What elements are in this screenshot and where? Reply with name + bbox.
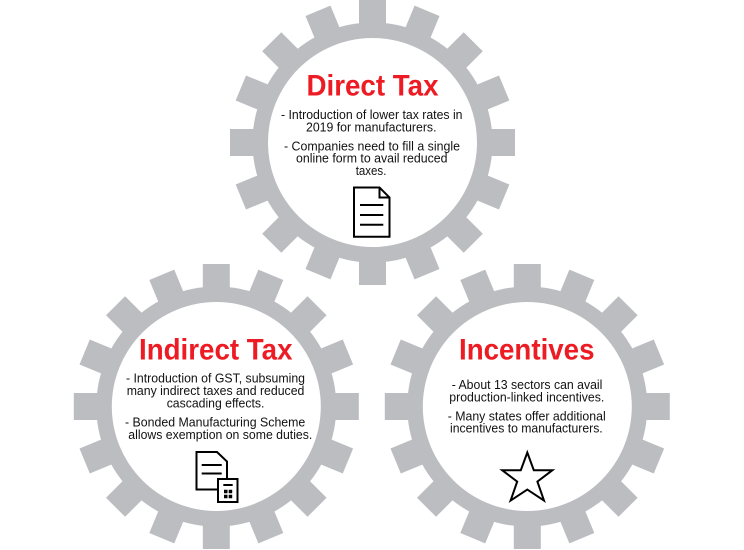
text block: indirect tax points: - Bonded Manufacturing Scheme	[125, 415, 305, 430]
text block: indirect tax points: allows exemption on some duties.	[128, 427, 312, 442]
panel: direct tax	[230, 0, 515, 285]
text block: direct tax points: - Companies need to fill a single	[284, 139, 460, 154]
icon: document	[354, 188, 390, 237]
text block: direct tax points: online form to avail reduced	[296, 151, 448, 166]
heading: direct tax: Direct Tax	[306, 70, 439, 103]
text block: incentives points: - Many states offer additional	[448, 408, 606, 423]
heading: indirect tax: Indirect Tax	[139, 333, 293, 366]
gear: direct tax	[230, 0, 515, 285]
icon: star	[502, 452, 552, 501]
text block: incentives points: - About 13 sectors can avail	[452, 377, 602, 392]
icon: document with calculator	[196, 452, 238, 502]
text block: direct tax points: 2019 for manufacturers.	[306, 120, 436, 135]
panel: indirect tax	[74, 264, 359, 549]
text block: indirect tax points	[125, 371, 312, 442]
panel: incentives	[385, 264, 670, 549]
text block: direct tax points	[281, 107, 462, 178]
text block: direct tax points: taxes.	[356, 163, 386, 178]
text block: indirect tax points: cascading effects.	[167, 395, 264, 410]
text block: direct tax points: - Introduction of lower tax rates in	[281, 107, 462, 122]
text block: incentives points: production-linked incentives.	[449, 390, 604, 405]
text block: incentives points: incentives to manufacturers.	[450, 421, 603, 436]
text block: indirect tax points: many indirect taxes and reduced	[127, 383, 304, 398]
gear: indirect tax	[74, 264, 359, 549]
heading: incentives: Incentives	[459, 333, 594, 366]
text block: indirect tax points: - Introduction of GST, subsuming	[126, 371, 305, 386]
text block: incentives points	[448, 377, 606, 436]
gear: incentives	[385, 264, 670, 549]
